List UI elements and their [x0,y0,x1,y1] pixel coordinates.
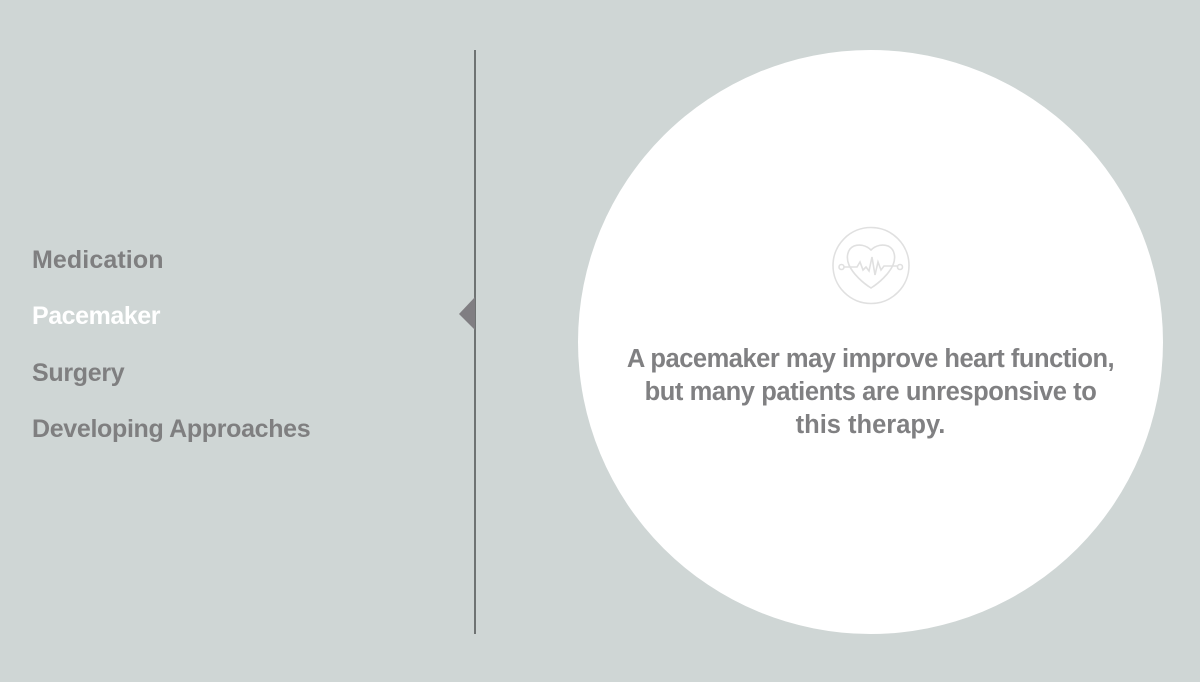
text line 2: but many patients are unresponsive to [645,378,1096,406]
icon: heart with pulse [832,226,910,304]
navigation menu [32,246,310,443]
arrow pointer [459,297,475,330]
menu item: Surgery: Surgery [32,359,124,387]
menu item: Medication: Medication [32,246,164,274]
menu item: Pacemaker (active): Pacemaker [32,302,160,330]
vertical divider with pointer [459,50,476,634]
menu item: Developing Approaches: Developing Approaches [32,415,310,443]
text line 1: A pacemaker may improve heart function, [627,345,1114,373]
text line 3: this therapy. [796,411,945,439]
body text [627,345,1114,439]
white circle panel [578,50,1163,634]
